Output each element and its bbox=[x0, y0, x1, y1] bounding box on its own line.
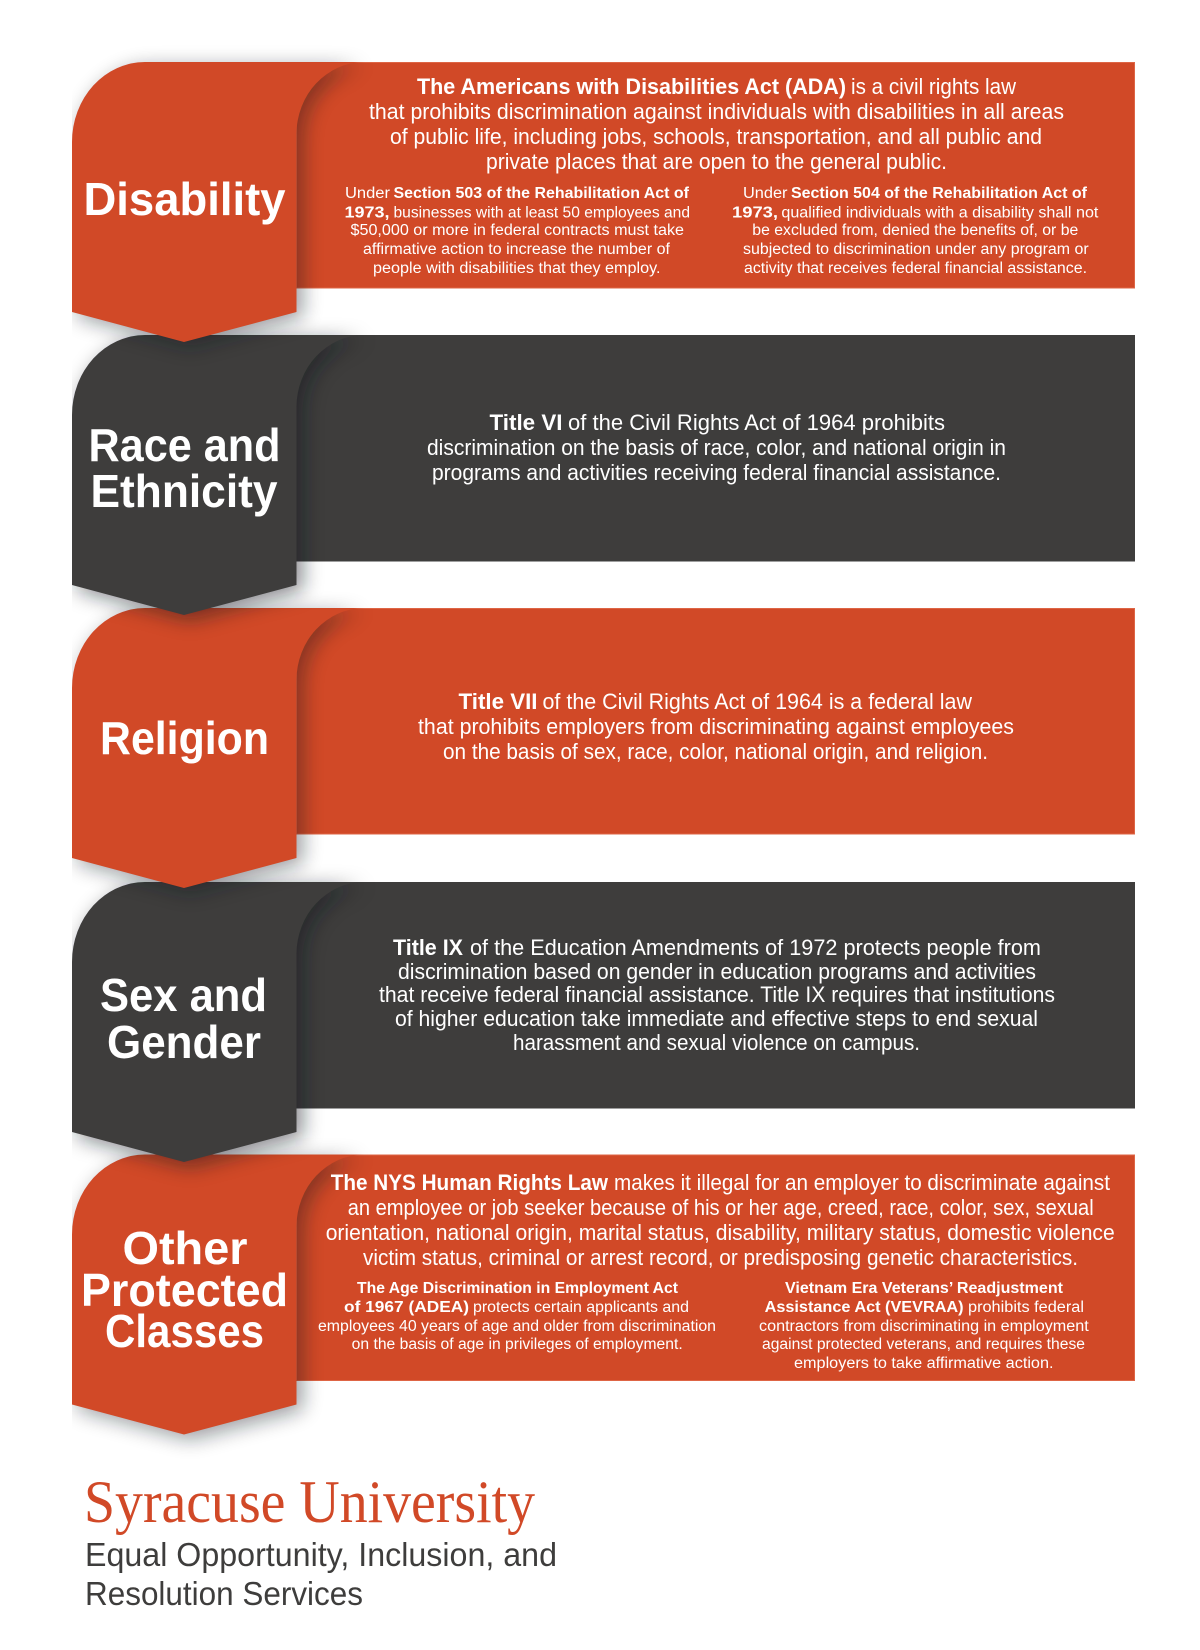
content panel background bbox=[296, 882, 1135, 1108]
text block: Section 503: businesses with at least 50 employees and bbox=[394, 204, 690, 222]
heading: Sex and Gender: Sex and bbox=[100, 969, 267, 1021]
text block: NYS Human Rights Law: an employee or job seeker because of his or her age, creed, race, color, sex, sexual bbox=[348, 1195, 1094, 1220]
heading: Race and Ethnicity: Ethnicity bbox=[90, 465, 278, 517]
text block: ADEA: employees 40 years of age and older from discrimination bbox=[318, 1318, 716, 1335]
heading: Other Protected Classes: Protected bbox=[81, 1264, 288, 1316]
panel: Other Protected Classes bbox=[72, 1154, 1134, 1440]
tab shadow bbox=[78, 67, 370, 347]
content panel background bbox=[296, 335, 1135, 562]
text block: ADEA: of 1967 (ADEA) bbox=[344, 1299, 469, 1316]
content panel background bbox=[296, 1155, 1134, 1380]
text block: ADA: private places that are open to the general public. bbox=[486, 149, 947, 174]
heading: Sex and Gender bbox=[100, 969, 267, 1068]
text block: Title VI: programs and activities receiving federal financial assistance. bbox=[432, 460, 1001, 485]
text block: VEVRAA: prohibits federal bbox=[968, 1299, 1084, 1316]
tab shadow bbox=[78, 887, 370, 1167]
tab shadow bbox=[78, 613, 370, 893]
text block: Title IX bbox=[379, 935, 1055, 1055]
tab shape bbox=[72, 1154, 364, 1434]
text block: VEVRAA: Assistance Act (VEVRAA) bbox=[765, 1299, 964, 1316]
footer: department name bbox=[85, 1536, 557, 1612]
content panel background bbox=[296, 608, 1134, 834]
text block: VEVRAA: against protected veterans, and requires these bbox=[762, 1336, 1085, 1353]
heading: Other Protected Classes: Classes bbox=[105, 1305, 264, 1357]
text block: NYS Human Rights Law bbox=[326, 1170, 1115, 1270]
text block: NYS Human Rights Law: makes it illegal for an employer to discriminate against bbox=[614, 1170, 1110, 1195]
text block: ADEA bbox=[318, 1280, 716, 1353]
text block: Section 504: activity that receives federal financial assistance. bbox=[744, 260, 1087, 277]
text block: Section 503: people with disabilities that they employ. bbox=[373, 260, 660, 277]
text block: NYS Human Rights Law: victim status, criminal or arrest record, or predisposing genetic characteristics. bbox=[363, 1245, 1078, 1270]
heading: Other Protected Classes: Other bbox=[122, 1222, 248, 1274]
text block: Title IX: harassment and sexual violence on campus. bbox=[513, 1030, 920, 1055]
text block: Title VII: on the basis of sex, race, color, national origin, and religion. bbox=[443, 739, 988, 764]
text block: ADA: that prohibits discrimination against individuals with disabilities in all areas bbox=[369, 99, 1064, 124]
text block: ADEA: protects certain applicants and bbox=[473, 1299, 689, 1316]
text block: Section 504: qualified individuals with a disability shall not bbox=[781, 204, 1099, 222]
text block: VEVRAA: employers to take affirmative action. bbox=[794, 1355, 1054, 1372]
text block: Section 504: be excluded from, denied the benefits of, or be bbox=[752, 222, 1078, 239]
text block: Title VI: discrimination on the basis of race, color, and national origin in bbox=[427, 435, 1006, 460]
text block: NYS Human Rights Law: orientation, national origin, marital status, disability, military status, domestic violence bbox=[326, 1220, 1115, 1245]
tab shadow bbox=[78, 1160, 370, 1440]
text block: Title VI: Title VI bbox=[490, 410, 562, 435]
text block: Section 503: Under bbox=[345, 185, 390, 202]
panel: Disability bbox=[72, 62, 1134, 347]
text block: Section 503: $50,000 or more in federal contracts must take bbox=[350, 222, 684, 239]
tab shape bbox=[72, 608, 364, 888]
text block: Title VII bbox=[418, 689, 1014, 764]
text block: Section 503 bbox=[344, 185, 690, 277]
text block: Section 504: 1973, bbox=[732, 204, 778, 222]
text block: Section 503: affirmative action to increase the number of bbox=[363, 241, 671, 258]
text block: ADA: The Americans with Disabilities Act (ADA) bbox=[417, 74, 846, 99]
heading: Race and Ethnicity: Race and bbox=[88, 419, 280, 471]
text block: NYS Human Rights Law: The NYS Human Rights Law bbox=[331, 1170, 609, 1195]
text block: VEVRAA: Vietnam Era Veterans’ Readjustment bbox=[785, 1280, 1063, 1297]
panel: Sex and Gender bbox=[72, 882, 1135, 1167]
text block: Section 504: Section 504 of the Rehabilitation Act of bbox=[791, 185, 1088, 202]
text block: Title VI bbox=[427, 410, 1006, 485]
text block: Section 504: Under bbox=[743, 185, 788, 202]
heading: Religion: Religion bbox=[100, 712, 269, 764]
tab shape bbox=[72, 882, 364, 1162]
text block: ADEA: The Age Discrimination in Employment Act bbox=[357, 1280, 678, 1297]
footer: Syracuse University wordmark: Syracuse University bbox=[84, 1469, 535, 1535]
text block: ADEA: on the basis of age in privileges of employment. bbox=[352, 1336, 683, 1353]
text block: Title IX: that receive federal financial assistance. Title IX requires that institutions bbox=[379, 982, 1055, 1007]
tab shape bbox=[72, 335, 364, 615]
text block: Section 504 bbox=[732, 185, 1099, 277]
footer: department name: Equal Opportunity, Inclusion, and bbox=[85, 1536, 557, 1573]
text block: Section 503: Section 503 of the Rehabilitation Act of bbox=[394, 185, 690, 202]
text block: ADA: is a civil rights law bbox=[851, 74, 1016, 99]
footer: department name: Resolution Services bbox=[85, 1575, 363, 1612]
panel: Religion bbox=[72, 608, 1134, 893]
text block: Section 504: subjected to discrimination under any program or bbox=[743, 241, 1089, 258]
tab shape bbox=[72, 62, 364, 342]
content panel background bbox=[296, 62, 1134, 288]
text block: ADA: of public life, including jobs, schools, transportation, and all public and bbox=[390, 124, 1042, 149]
text block: Title IX: Title IX bbox=[393, 935, 463, 960]
panel: Race and Ethnicity bbox=[72, 335, 1135, 620]
text block: Title IX: of higher education take immediate and effective steps to end sexual bbox=[395, 1006, 1038, 1031]
text block: Title VII: that prohibits employers from discriminating against employees bbox=[418, 714, 1014, 739]
text block: Title IX: of the Education Amendments of 1972 protects people from bbox=[470, 935, 1041, 960]
heading: Sex and Gender: Gender bbox=[107, 1016, 261, 1068]
heading: Disability: Disability bbox=[84, 173, 286, 225]
text block: Title IX: discrimination based on gender in education programs and activities bbox=[398, 959, 1036, 984]
heading: Other Protected Classes bbox=[81, 1222, 288, 1357]
text block: Title VII: Title VII bbox=[458, 689, 538, 714]
text block: VEVRAA bbox=[759, 1280, 1089, 1372]
text block: Section 503: 1973, bbox=[344, 204, 390, 222]
text block: VEVRAA: contractors from discriminating in employment bbox=[759, 1318, 1089, 1335]
text block: Title VII: of the Civil Rights Act of 1964 is a federal law bbox=[542, 689, 972, 714]
text block: Title VI: of the Civil Rights Act of 1964 prohibits bbox=[568, 410, 945, 435]
heading: Race and Ethnicity bbox=[88, 419, 280, 517]
text block: ADA bbox=[369, 74, 1064, 174]
tab shadow bbox=[78, 340, 370, 620]
